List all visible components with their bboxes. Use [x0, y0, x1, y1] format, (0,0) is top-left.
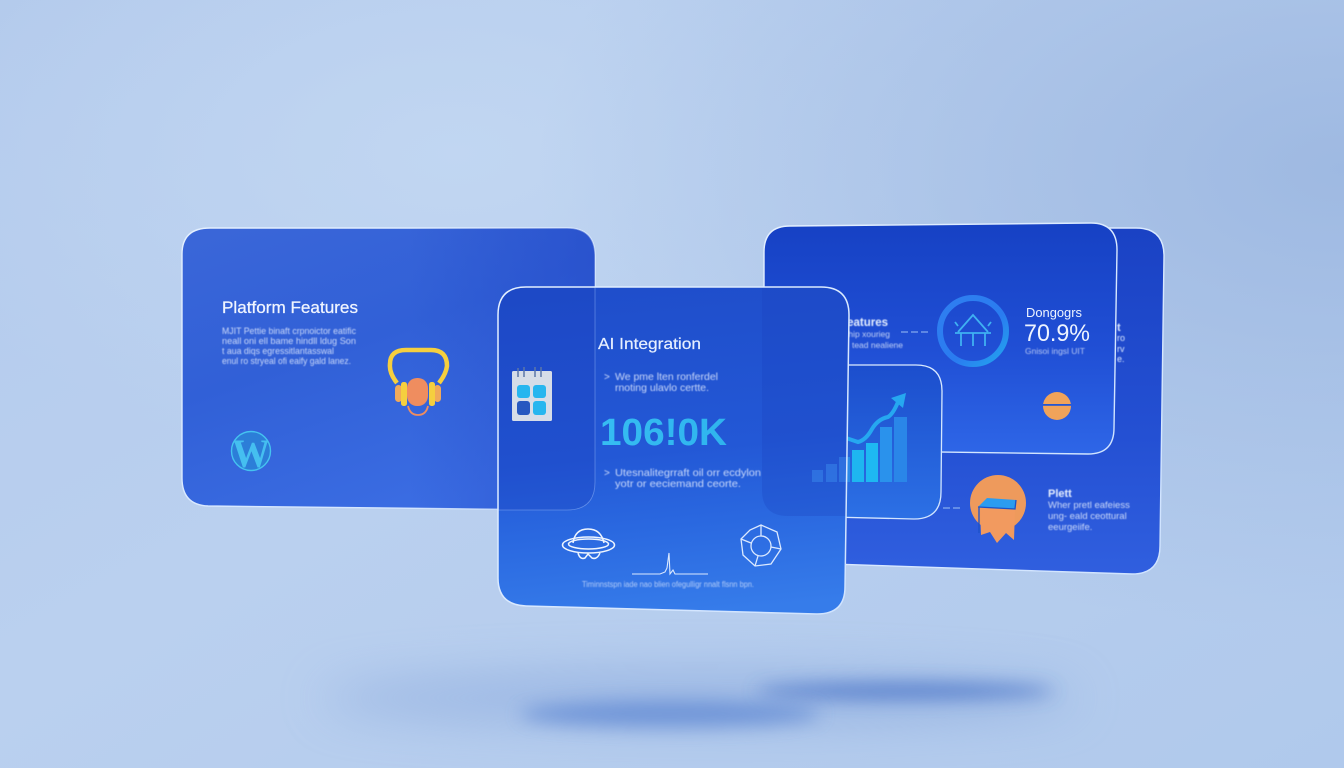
plant text block: Plett — [1048, 488, 1072, 500]
plant text block: ung- eald ceottural — [1048, 511, 1127, 522]
panel: back right — [790, 228, 1164, 574]
icon: wordpress: W — [232, 431, 270, 476]
heading: AI Integration — [598, 336, 701, 353]
stat: 70.9%: 70.9% — [1024, 320, 1090, 347]
hidden side text: ro — [1117, 333, 1125, 343]
icon: planet — [562, 529, 614, 558]
panel: upper right — [764, 223, 1117, 454]
hidden side text: t — [1117, 322, 1121, 334]
stat: 70.9%: Gnisoi ingsl UIT — [1025, 346, 1085, 356]
stat: 70.9% — [1024, 306, 1090, 356]
icon: ring with house — [940, 298, 1006, 364]
icon: headset — [390, 350, 447, 415]
features text block: tead nealiene — [852, 340, 903, 350]
overlap tint: right panels — [762, 288, 848, 516]
plant text block: eeurgeiife. — [1048, 522, 1092, 533]
body text: enul ro stryeal ofi eaify gald lanez. — [222, 356, 351, 367]
features text block: Features — [840, 317, 888, 329]
floating shadow — [320, 672, 1080, 727]
bullet text 1 — [604, 371, 718, 394]
footnote: Timinnstspn iade nao blien ofegulligr nnalt flsnn bpn. — [582, 580, 754, 589]
bullet text 2: > — [604, 468, 610, 479]
bullet text 1: > — [604, 372, 610, 383]
panel outline — [498, 287, 849, 614]
bullet text 1: rnoting ulavlo certte. — [615, 382, 709, 394]
body text: MJIT Pettie binaft crpnoictor eatific — [222, 326, 356, 337]
features text block: fhip xourieg — [846, 329, 890, 339]
body text: t aua diqs egressitlantasswal — [222, 346, 334, 357]
plant text block — [1048, 488, 1130, 533]
hidden side text: rv — [1117, 344, 1125, 354]
bullet text 2: Utesnalitegrraft oil orr ecdylon — [615, 467, 761, 479]
hidden side text — [1117, 322, 1125, 364]
bullet text 2: yotr or eeciemand ceorte. — [615, 478, 741, 490]
icon: calendar — [512, 367, 552, 421]
body text: neall oni ell bame hindll ldug Son — [222, 336, 356, 347]
bullet text 2 — [604, 467, 761, 490]
plant text block: Wher pretl eafeiess — [1048, 500, 1130, 511]
body text — [222, 326, 356, 367]
features text block — [840, 317, 903, 350]
panel: platform features — [182, 228, 595, 510]
icon: orange box — [970, 475, 1026, 543]
panel: AI integration — [498, 287, 849, 614]
bullet text 1: We pme lten ronferdel — [615, 371, 718, 383]
trend arrow — [846, 393, 906, 442]
heading: Platform Features — [222, 298, 358, 317]
faint bars seen through glass — [812, 457, 848, 482]
stat: 70.9%: Dongogrs — [1026, 306, 1082, 320]
hidden side text: e. — [1117, 354, 1125, 364]
icon: orange disc — [1043, 392, 1071, 420]
big number: 106!0K — [600, 412, 728, 454]
bar chart — [839, 417, 907, 482]
overlap tint: left panel — [499, 288, 595, 510]
icon: gear hexagon — [741, 525, 781, 566]
panel: chart — [762, 365, 962, 519]
waveform line — [632, 553, 708, 574]
